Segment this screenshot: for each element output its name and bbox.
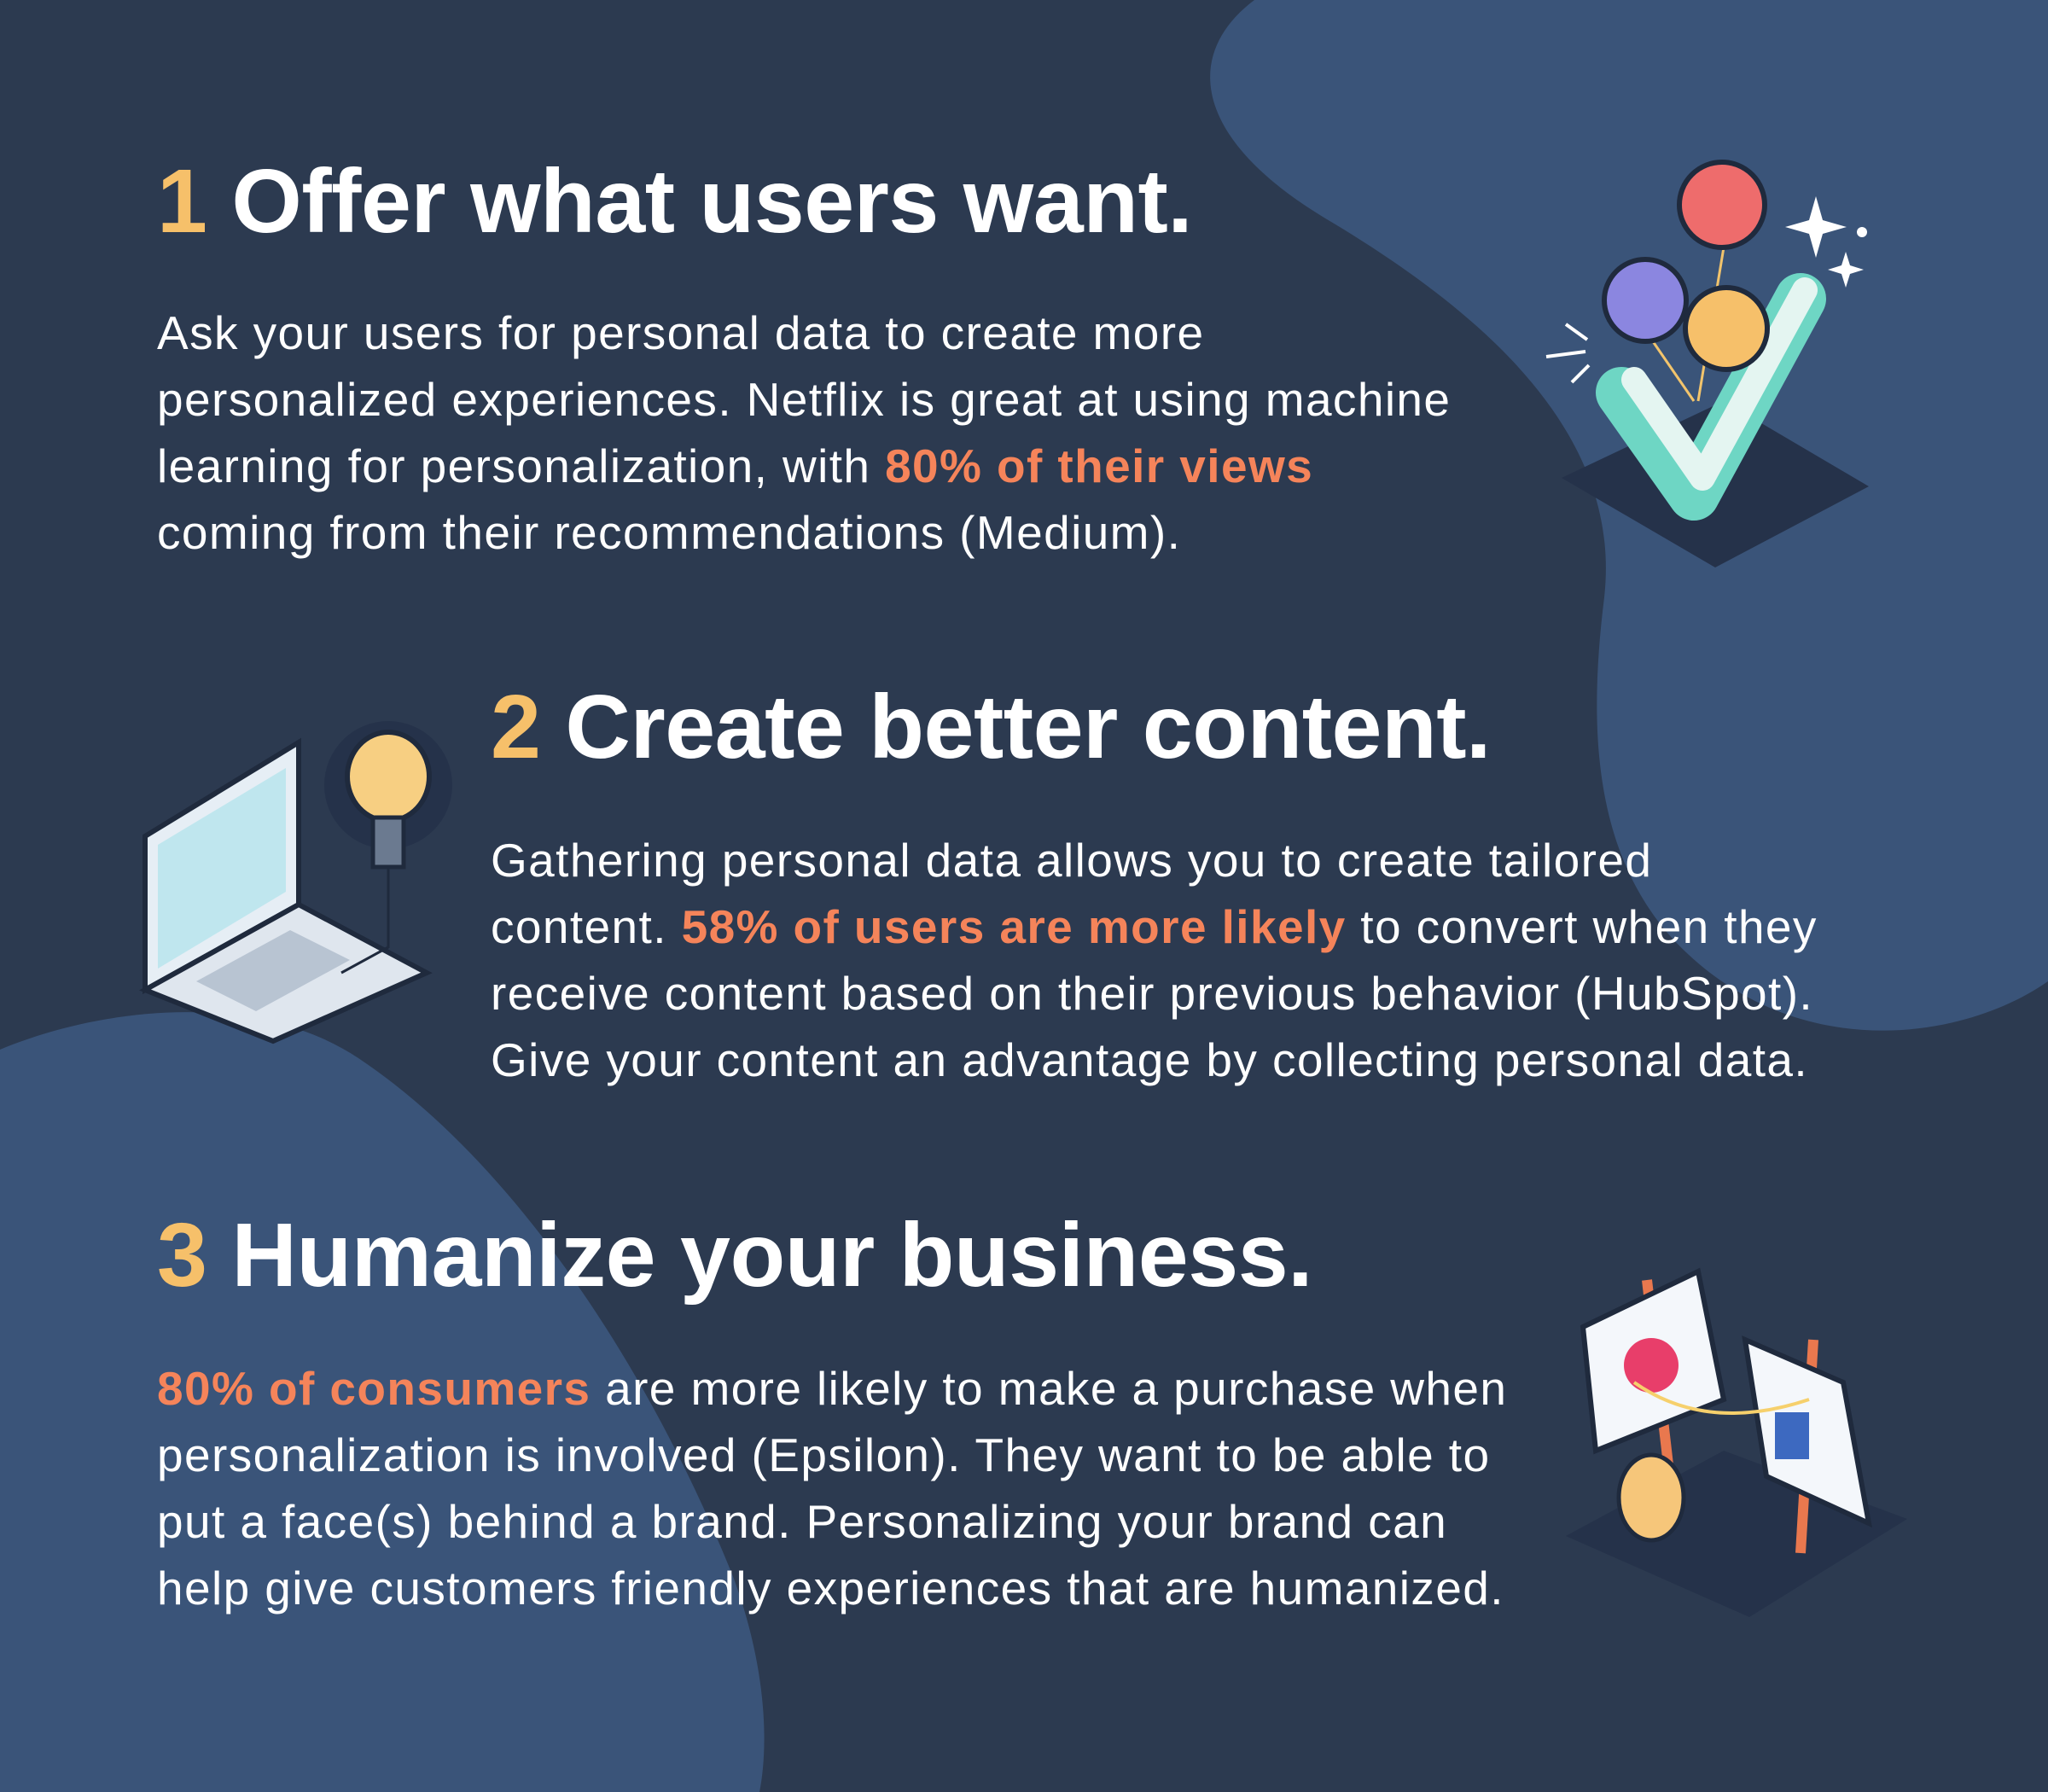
text block 2: receive content based on their previous behavior (HubSpot). xyxy=(491,967,1813,1020)
heading 3: 3 Humanize your business. xyxy=(157,1205,1312,1306)
text block 1 xyxy=(157,306,1451,559)
icon: balloons with checkmark xyxy=(1546,162,1869,567)
icon: laptop with light bulb xyxy=(145,721,452,1041)
text block 2 xyxy=(491,834,1818,1086)
text block 1: learning for personalization, with 80% of their views xyxy=(157,439,1313,492)
text block 3: put a face(s) behind a brand. Personalizing your brand can xyxy=(157,1495,1447,1548)
heading 1: 1 Offer what users want. xyxy=(157,151,1192,252)
background blob: bottom left xyxy=(0,1012,765,1792)
text block 2: Give your content an advantage by collecting personal data. xyxy=(491,1033,1808,1086)
text block 3: 80% of consumers are more likely to make a purchase when xyxy=(157,1362,1507,1415)
text block 3 xyxy=(157,1362,1507,1615)
text block 2: content. 58% of users are more likely to convert when they xyxy=(491,900,1818,953)
icon: signs with cat xyxy=(1566,1271,1907,1617)
background blob: top right xyxy=(1210,0,2048,1031)
text block 3: help give customers friendly experiences that are humanized. xyxy=(157,1562,1504,1615)
text block 1: personalized experiences. Netflix is great at using machine xyxy=(157,373,1451,426)
text block 1: Ask your users for personal data to create more xyxy=(157,306,1204,359)
text block 2: Gathering personal data allows you to create tailored xyxy=(491,834,1652,887)
heading 2: 2 Create better content. xyxy=(491,677,1491,777)
text block 3: personalization is involved (Epsilon). They want to be able to xyxy=(157,1428,1490,1481)
text block 1: coming from their recommendations (Medium). xyxy=(157,506,1181,559)
